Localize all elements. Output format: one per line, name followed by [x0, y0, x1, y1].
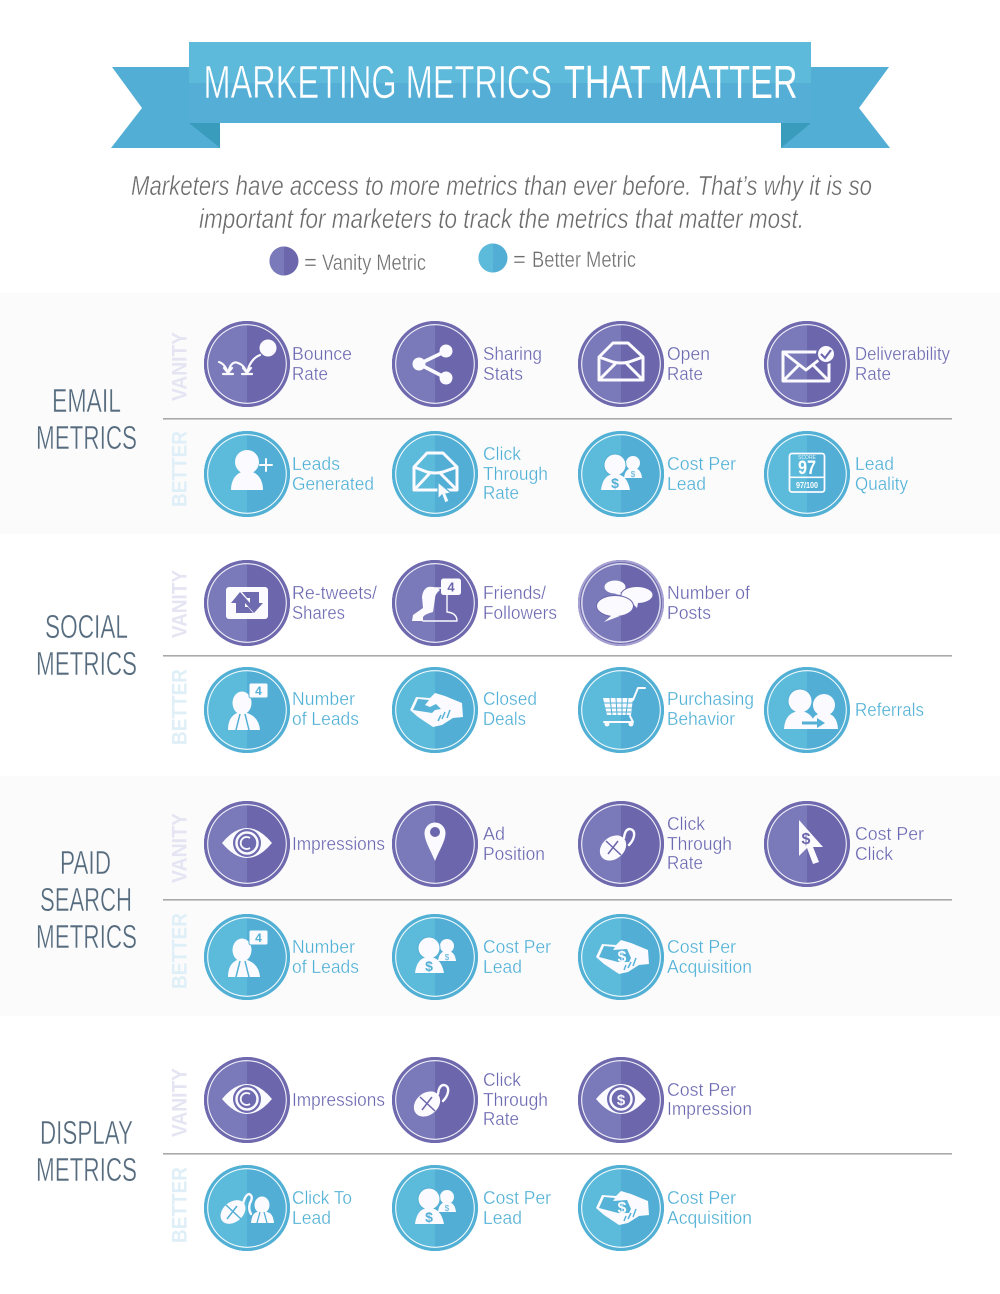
metric: cost per lead — [578, 431, 736, 517]
icon: envelope with check — [764, 321, 850, 407]
heading: social metrics: SOCIAL — [45, 608, 128, 645]
metric: click to lead — [204, 1165, 352, 1251]
label — [292, 688, 359, 729]
label: Sharing — [483, 343, 542, 364]
label: Lead — [292, 1207, 331, 1228]
label: Acquisition — [667, 1207, 752, 1228]
title text: THAT MATTER — [564, 56, 798, 108]
legend: better metric: = — [513, 247, 526, 272]
label: Rate — [292, 363, 328, 384]
icon: handshake with dollar — [578, 1165, 664, 1251]
label: Cost Per — [483, 1187, 551, 1208]
label: Ad — [483, 823, 505, 844]
icon: followers with count badge — [392, 560, 478, 646]
metric: cost per impression — [578, 1057, 752, 1143]
metric: deliverability rate — [764, 321, 951, 407]
row label: vanity: VANITY — [168, 570, 192, 638]
row label: better: BETTER — [168, 669, 192, 745]
row label: vanity: VANITY — [168, 813, 192, 883]
metric: number of posts — [578, 560, 751, 646]
label: Click To — [292, 1187, 352, 1208]
label: Through — [667, 833, 732, 854]
metric: cost per lead — [392, 1165, 551, 1251]
metric: friends / followers — [392, 560, 557, 646]
label: Lead — [667, 473, 706, 494]
label: Cost Per — [483, 936, 551, 957]
metric: lead quality — [764, 431, 909, 517]
icon: referral people — [764, 667, 850, 753]
label — [292, 343, 352, 384]
legend: vanity metric: Vanity Metric — [322, 250, 426, 275]
metric: number of leads — [204, 914, 359, 1000]
label: Deals — [483, 708, 526, 729]
heading: display metrics: DISPLAY — [40, 1114, 133, 1151]
label: Through — [483, 1089, 548, 1110]
label: Click — [667, 813, 706, 834]
icon: people with dollars — [578, 431, 664, 517]
intro text — [131, 170, 872, 234]
legend: better metric: Better Metric — [532, 247, 636, 272]
icon: lead with count badge — [204, 667, 290, 753]
label: Impression — [667, 1098, 752, 1119]
metric: closed deals — [392, 667, 537, 753]
label: Rate — [483, 482, 519, 503]
label — [292, 1187, 352, 1228]
metric: click through rate — [392, 1057, 548, 1143]
label — [855, 453, 909, 494]
label: of Leads — [292, 708, 359, 729]
label — [667, 582, 751, 623]
label: Click — [483, 443, 522, 464]
icon: lead with count badge: 4 — [255, 684, 262, 698]
row label: better: BETTER — [168, 913, 192, 989]
metric: referrals — [764, 667, 924, 753]
label — [483, 582, 557, 623]
row label: better: BETTER — [168, 431, 192, 507]
metric: number of leads — [204, 667, 359, 753]
heading: email metrics: METRICS — [36, 419, 137, 456]
icon: lead with count badge: 4 — [255, 931, 262, 945]
label: Rate — [667, 363, 703, 384]
icon: people with dollars: $ — [425, 1209, 433, 1225]
row label: vanity: VANITY — [168, 1068, 192, 1137]
label — [667, 1187, 752, 1228]
metric: impressions — [204, 801, 385, 887]
heading: social metrics — [36, 608, 137, 682]
label — [292, 453, 374, 494]
label: Purchasing — [667, 688, 754, 709]
label: Through — [483, 463, 548, 484]
panel: paid search metrics — [36, 801, 952, 1000]
label: Acquisition — [667, 956, 752, 977]
icon: eye — [204, 801, 290, 887]
icon: people with dollars: $ — [425, 958, 433, 974]
metric: retweets / shares — [204, 560, 378, 646]
label — [667, 688, 754, 729]
icon: retweet arrows — [204, 560, 290, 646]
title banner — [111, 42, 890, 148]
row label: vanity: VANITY — [168, 332, 192, 401]
metric: click through rate — [392, 431, 548, 517]
label: Leads — [292, 453, 340, 474]
label: Impressions — [292, 833, 385, 854]
label: Number of — [667, 582, 751, 603]
label: Referrals — [855, 699, 924, 720]
label: Cost Per — [855, 823, 924, 844]
label: Position — [483, 843, 545, 864]
label — [855, 343, 951, 384]
icon: computer mouse — [392, 1057, 478, 1143]
icon: handshake with dollar: $ — [618, 1200, 627, 1217]
label: of Leads — [292, 956, 359, 977]
heading: display metrics — [36, 1114, 137, 1188]
label: Deliverability — [855, 343, 951, 364]
label — [292, 582, 378, 623]
icon: mouse and lead — [204, 1165, 290, 1251]
icon: score card: SCORE — [798, 455, 817, 461]
legend: vanity metric: = — [304, 250, 317, 275]
panel: social metrics — [36, 560, 952, 753]
label: Quality — [855, 473, 909, 494]
label — [483, 1069, 548, 1129]
label — [667, 813, 732, 873]
label — [483, 1187, 551, 1228]
icon: people with dollars: $ — [445, 1204, 450, 1213]
label: Cost Per — [667, 453, 736, 474]
icon: bouncing ball — [204, 321, 290, 407]
label — [667, 936, 752, 977]
label: Rate — [667, 852, 703, 873]
heading: paid search metrics: PAID — [60, 844, 111, 881]
icon: people with dollars — [392, 914, 478, 1000]
label — [483, 443, 548, 503]
label: Shares — [292, 602, 345, 623]
icon: score card: 97 — [798, 458, 816, 479]
label — [292, 936, 359, 977]
label: Bounce — [292, 343, 352, 364]
label: Cost Per — [667, 1079, 736, 1100]
intro text: important for marketers to track the metrics that matter most. — [199, 203, 804, 234]
heading: email metrics — [36, 382, 137, 456]
label: Re-tweets/ — [292, 582, 378, 603]
label: Followers — [483, 602, 557, 623]
title text: MARKETING METRICS — [204, 56, 552, 108]
icon: eye with dollar — [578, 1057, 664, 1143]
label: Friends/ — [483, 582, 547, 603]
icon: computer mouse — [578, 801, 664, 887]
icon: speech bubbles — [578, 560, 664, 646]
label: Click — [855, 843, 894, 864]
icon: people with dollars: $ — [611, 475, 619, 491]
icon: eye — [204, 1057, 290, 1143]
icon: people with dollars — [392, 1165, 478, 1251]
legend: vanity metric — [270, 246, 426, 276]
row label: better: BETTER — [168, 1167, 192, 1243]
label: Closed — [483, 688, 537, 709]
metric: leads generated — [204, 431, 374, 517]
heading: display metrics: METRICS — [36, 1151, 137, 1188]
icon: share — [392, 321, 478, 407]
metric: cost per acquisition — [578, 1165, 752, 1251]
metric: purchasing behavior — [578, 667, 754, 753]
panel: email metrics — [36, 321, 952, 517]
label: Generated — [292, 473, 374, 494]
icon: add person — [204, 431, 290, 517]
icon: followers with count badge: 4 — [447, 580, 455, 594]
label: Rate — [483, 1108, 519, 1129]
label — [667, 343, 710, 384]
metric: sharing stats — [392, 321, 542, 407]
icon: lead with count badge — [204, 914, 290, 1000]
icon: handshake with dollar — [578, 914, 664, 1000]
metric: click through rate — [578, 801, 732, 887]
metric: impressions — [204, 1057, 385, 1143]
icon: shopping cart — [578, 667, 664, 753]
legend: better metric — [478, 244, 636, 272]
icon: open envelope — [578, 321, 664, 407]
icon: eye with dollar: $ — [617, 1092, 626, 1109]
label: Lead — [483, 1207, 522, 1228]
label — [855, 823, 924, 864]
icon: envelope with cursor — [392, 431, 478, 517]
label: Posts — [667, 602, 711, 623]
icon: map pin — [392, 801, 478, 887]
label: Open — [667, 343, 710, 364]
label: Rate — [855, 363, 891, 384]
metric: cost per click — [764, 801, 924, 887]
label — [483, 823, 545, 864]
metric: cost per lead — [392, 914, 551, 1000]
label: Number — [292, 688, 355, 709]
icon: handshake with dollar: $ — [618, 949, 627, 966]
heading: email metrics: EMAIL — [52, 382, 121, 419]
label: Number — [292, 936, 355, 957]
label — [667, 1079, 752, 1119]
label: Lead — [855, 453, 894, 474]
metric: open rate — [578, 321, 710, 407]
icon: score card — [764, 431, 850, 517]
label: Cost Per — [667, 1187, 736, 1208]
label — [667, 453, 736, 494]
icon: handshake — [392, 667, 478, 753]
icon: people with dollars: $ — [631, 470, 636, 479]
label: Click — [483, 1069, 522, 1090]
heading: paid search metrics: METRICS — [36, 918, 137, 955]
icon: people with dollars: $ — [445, 953, 450, 962]
heading: social metrics: METRICS — [36, 645, 137, 682]
label — [483, 343, 542, 384]
heading: paid search metrics — [36, 844, 137, 955]
metric: cost per acquisition — [578, 914, 752, 1000]
label — [483, 936, 551, 977]
label: Lead — [483, 956, 522, 977]
label: Behavior — [667, 708, 735, 729]
label: Stats — [483, 363, 523, 384]
metric: bounce rate — [204, 321, 352, 407]
icon: cursor with dollar — [764, 801, 850, 887]
metric: ad position — [392, 801, 545, 887]
icon: cursor with dollar: $ — [802, 831, 811, 848]
icon: score card: 97/100 — [796, 481, 818, 490]
panel: display metrics — [36, 1057, 952, 1251]
heading: paid search metrics: SEARCH — [40, 881, 132, 918]
label: Impressions — [292, 1089, 385, 1110]
label — [483, 688, 537, 729]
label: Cost Per — [667, 936, 736, 957]
